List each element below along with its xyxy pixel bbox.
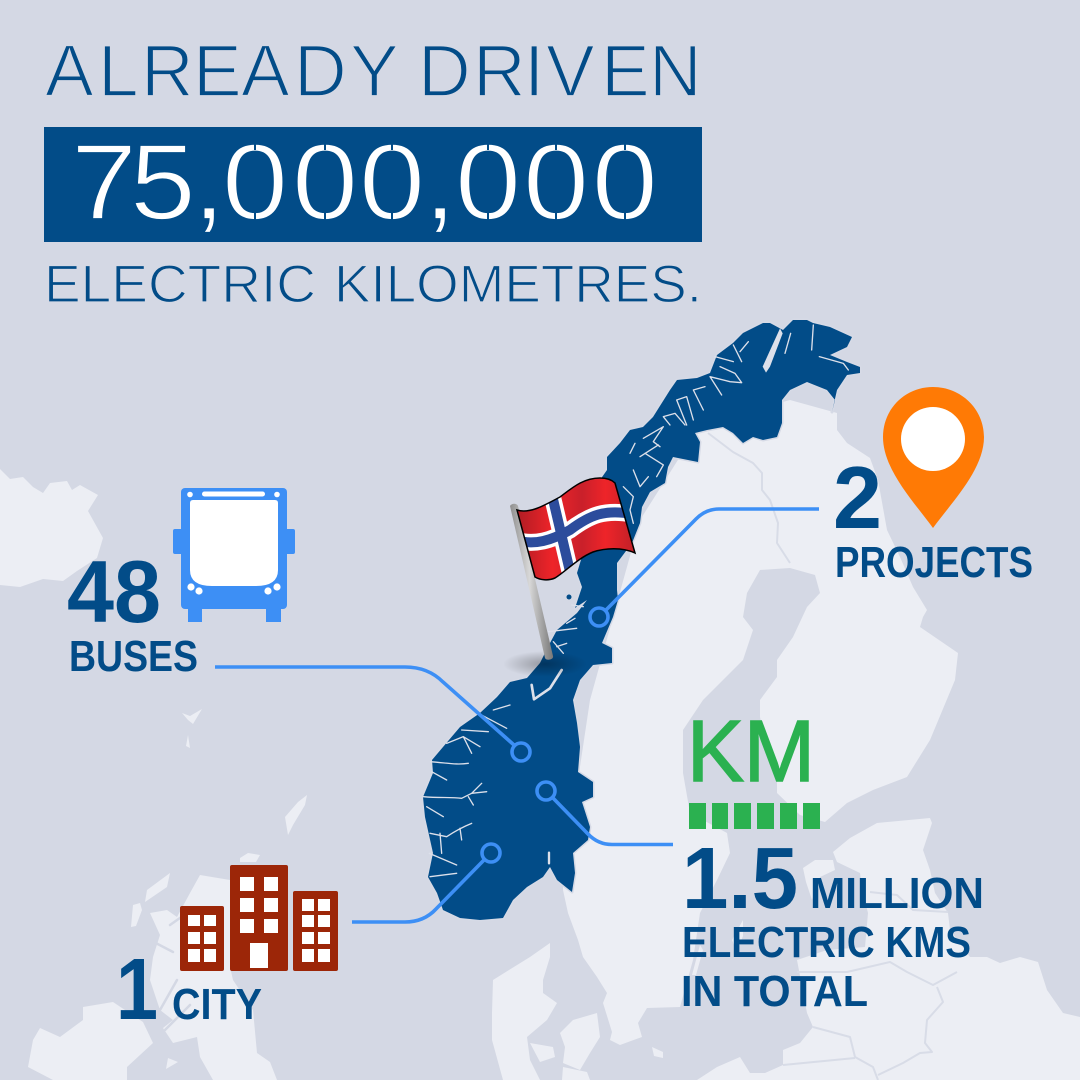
connector line: buses <box>215 667 530 761</box>
stat: 48 buses <box>67 542 198 681</box>
icon: location pin <box>883 387 984 528</box>
connector line: city <box>352 844 500 922</box>
background map of northern Europe <box>0 400 1080 1080</box>
subtitle: electric kilometres: ELECTRIC <box>44 255 316 314</box>
stat: 1.5 million electric kms in total: ELECTRIC KMS <box>682 918 971 967</box>
map of Norway <box>423 320 860 920</box>
stat: 1.5 million electric kms in total: IN TOTAL <box>681 967 868 1016</box>
stat: 2 projects: PROJECTS <box>835 538 1033 587</box>
stat: 48 buses: BUSES <box>69 632 198 681</box>
stat: 2 projects <box>833 448 1033 587</box>
icon: Norwegian flag on pole <box>503 478 635 677</box>
icon: city buildings <box>180 865 338 971</box>
stat: 1.5 million electric kms in total: MILLION <box>810 869 984 918</box>
stat: 1.5 million electric kms in total <box>681 830 984 1016</box>
subtitle: electric kilometres: KILOMETRES. <box>334 255 702 314</box>
stat: 1 city: CITY <box>172 980 262 1029</box>
stat: 1 city <box>116 941 262 1038</box>
connector line: kilometres <box>537 782 673 844</box>
stat: 48 buses: 48 <box>67 542 161 641</box>
stat: 2 projects: 2 <box>833 448 882 547</box>
connector line: projects <box>590 509 819 626</box>
icon: bus <box>173 488 295 622</box>
icon: KM road sign: KM <box>687 703 815 800</box>
headline number banner: 75,000,000 <box>71 122 658 243</box>
stat: 1.5 million electric kms in total: 1.5 <box>682 830 798 927</box>
stat: 1 city: 1 <box>116 941 158 1038</box>
subtitle: electric kilometres <box>44 255 702 314</box>
title line: already driven: ALREADY DRIVEN <box>45 31 702 112</box>
